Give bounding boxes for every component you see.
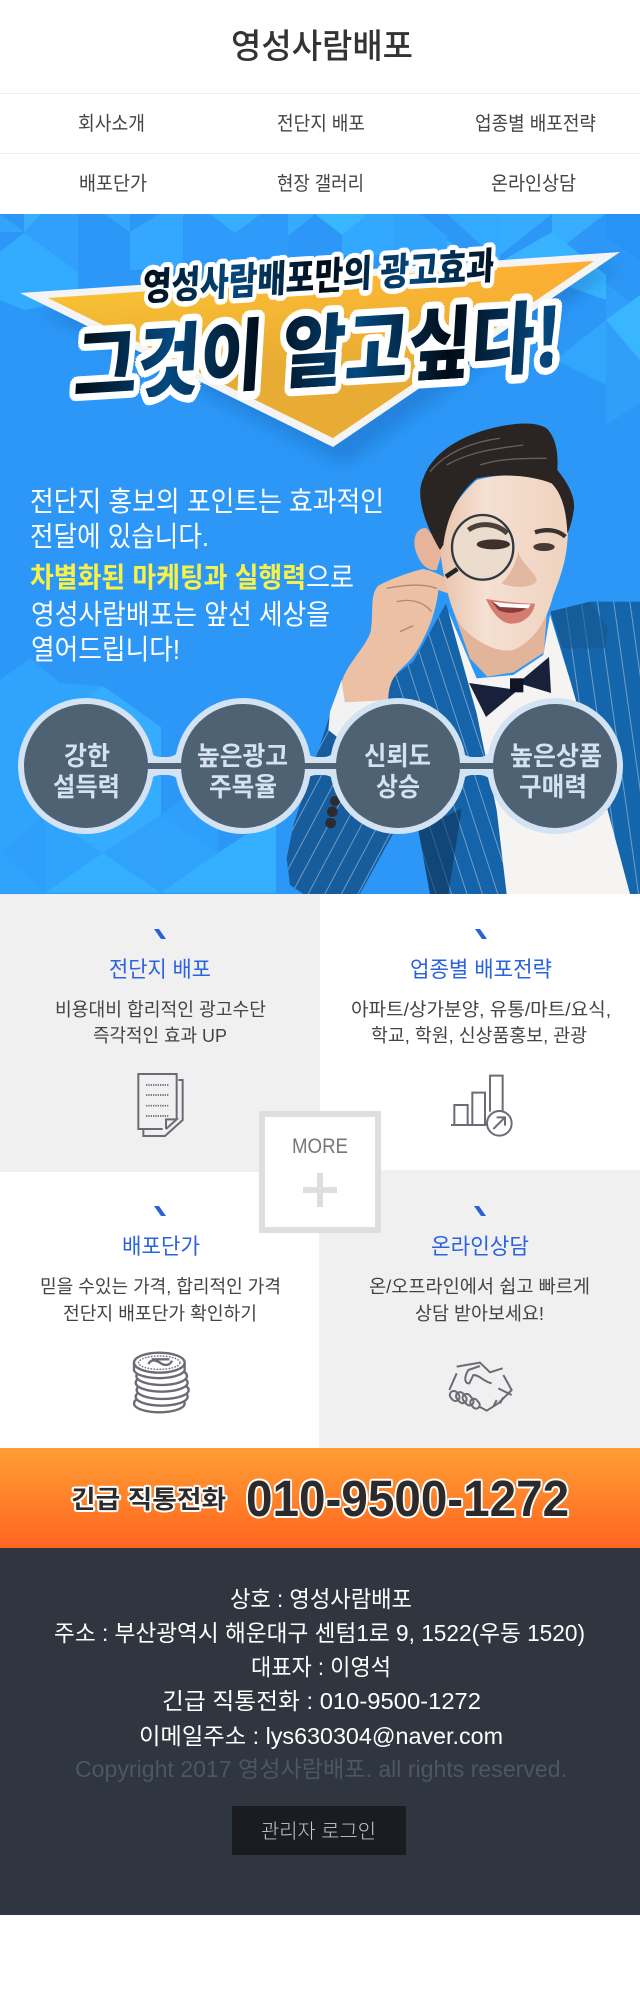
text: 영성사람배포만의 광고효과 <box>142 235 496 312</box>
navigation menu: 전단지 배포 <box>277 113 365 135</box>
panel: hero banner <box>0 214 640 894</box>
urgent phone number: 010-9500-1272 <box>246 1470 569 1527</box>
navigation menu: 업종별 배포전략 <box>475 113 596 135</box>
company info: 대표자 : 이영석 <box>251 1654 391 1680</box>
panel: urgent phone band <box>0 1448 640 1548</box>
text: 영성사람배포만의 광고효과 <box>142 235 496 312</box>
neck <box>450 602 547 677</box>
navigation menu <box>0 93 640 195</box>
feature bubbles: 높은상품 <box>510 741 602 771</box>
panel: 온라인상담: 온/오프라인에서 쉽고 빠르게 <box>369 1276 590 1297</box>
panel: 배포단가: 배포단가 <box>122 1234 200 1259</box>
headline large <box>69 273 566 420</box>
panel: 업종별 배포전략 <box>320 894 640 1170</box>
jacket right <box>550 602 640 894</box>
mouth <box>486 599 535 624</box>
panel: 온라인상담: 상담 받아보세요! <box>415 1303 544 1324</box>
nose shadow <box>502 552 537 587</box>
icon: handshake <box>448 1363 512 1411</box>
admin login button: 관리자 로그인 <box>261 1820 376 1843</box>
company info: 상호 : 영성사람배포 <box>230 1586 412 1612</box>
header logo title: 영성사람배포 <box>231 19 413 68</box>
company info <box>54 1586 585 1749</box>
jacket left <box>387 603 507 894</box>
panel: 온라인상담 <box>319 1170 640 1448</box>
company info: 이메일주소 : lys630304@naver.com <box>139 1723 503 1749</box>
hero copy text: 차별화된 마케팅과 실행력 <box>30 562 306 593</box>
hero copy text: 영성사람배포는 앞선 세상을 <box>31 599 330 630</box>
more button <box>262 1114 378 1230</box>
navigation menu: 현장 갤러리 <box>277 173 364 195</box>
navigation menu: 온라인상담 <box>491 173 576 195</box>
panel: footer <box>0 1548 640 1915</box>
company info: 주소 : 부산광역시 해운대구 센텀1로 9, 1522(우동 1520) <box>54 1620 585 1646</box>
panel: 전단지 배포 <box>0 894 320 1172</box>
panel: 업종별 배포전략: 아파트/상가분양, 유통/마트/요식, <box>351 999 611 1020</box>
icon: coins <box>134 1353 189 1412</box>
panel: 배포단가: 전단지 배포단가 확인하기 <box>63 1303 257 1324</box>
panel: 전단지 배포: 즉각적인 효과 UP <box>93 1025 227 1046</box>
urgent phone label: 긴급 직통전화 <box>71 1486 226 1514</box>
feature bubbles: 주목율 <box>209 772 277 802</box>
cuff <box>328 680 388 743</box>
ear <box>414 528 443 570</box>
panel: 전단지 배포: 비용대비 합리적인 광고수단 <box>55 999 266 1020</box>
hand <box>342 569 458 702</box>
text: 그것이 알고싶다! <box>71 273 566 420</box>
bow tie <box>469 657 551 717</box>
arrow banner <box>20 252 620 447</box>
hero copy text: 열어드립니다! <box>31 634 180 665</box>
panel: 온라인상담: 온라인상담 <box>431 1234 529 1259</box>
shirt <box>448 612 630 894</box>
hero copy text <box>30 486 384 665</box>
feature bubbles <box>18 698 623 834</box>
feature bubbles: 높은광고 <box>197 741 288 771</box>
panel: 전단지 배포: 전단지 배포 <box>109 957 211 982</box>
text: 그것이 알고싶다! <box>71 273 566 420</box>
hero copy text: 으로 <box>306 562 354 593</box>
icon: plus <box>303 1173 337 1207</box>
headline small <box>140 235 498 312</box>
feature bubbles: 강한 <box>64 741 110 771</box>
jacket buttons <box>325 796 340 828</box>
icon: document <box>138 1074 183 1136</box>
hero copy text: 전단지 홍보의 포인트는 효과적인 <box>30 486 384 517</box>
panel: 배포단가: 믿을 수있는 가격, 합리적인 가격 <box>40 1276 281 1297</box>
feature bubbles: 구매력 <box>519 772 587 802</box>
hero copy text: 전달에 있습니다. <box>30 521 209 552</box>
feature bubbles: 설득력 <box>53 772 120 802</box>
admin login button <box>232 1806 406 1855</box>
background triangles top <box>0 214 640 425</box>
right eyebrow and eye <box>535 530 565 537</box>
company info: 긴급 직통전화 : 010-9500-1272 <box>162 1688 481 1714</box>
magnifying glass <box>446 515 513 580</box>
navigation menu: 배포단가 <box>79 173 147 195</box>
arrow banner shadow <box>40 265 620 465</box>
panel: 배포단가 <box>0 1172 319 1448</box>
copyright: Copyright 2017 영성사람배포. all rights reserved. <box>75 1756 567 1782</box>
navigation menu: 회사소개 <box>78 113 145 135</box>
feature bubbles: 상승 <box>376 772 420 802</box>
hair <box>420 424 574 550</box>
face <box>440 475 568 651</box>
more button: MORE <box>292 1135 348 1158</box>
icon: bar chart <box>451 1076 512 1136</box>
feature bubbles: 신뢰도 <box>364 741 431 771</box>
sleeve <box>287 695 417 894</box>
man with magnifying glass photo <box>287 424 640 894</box>
panel: 업종별 배포전략: 업종별 배포전략 <box>410 957 552 982</box>
panel: 업종별 배포전략: 학교, 학원, 신상품홍보, 관광 <box>371 1025 587 1046</box>
background triangles bottom <box>0 658 276 893</box>
